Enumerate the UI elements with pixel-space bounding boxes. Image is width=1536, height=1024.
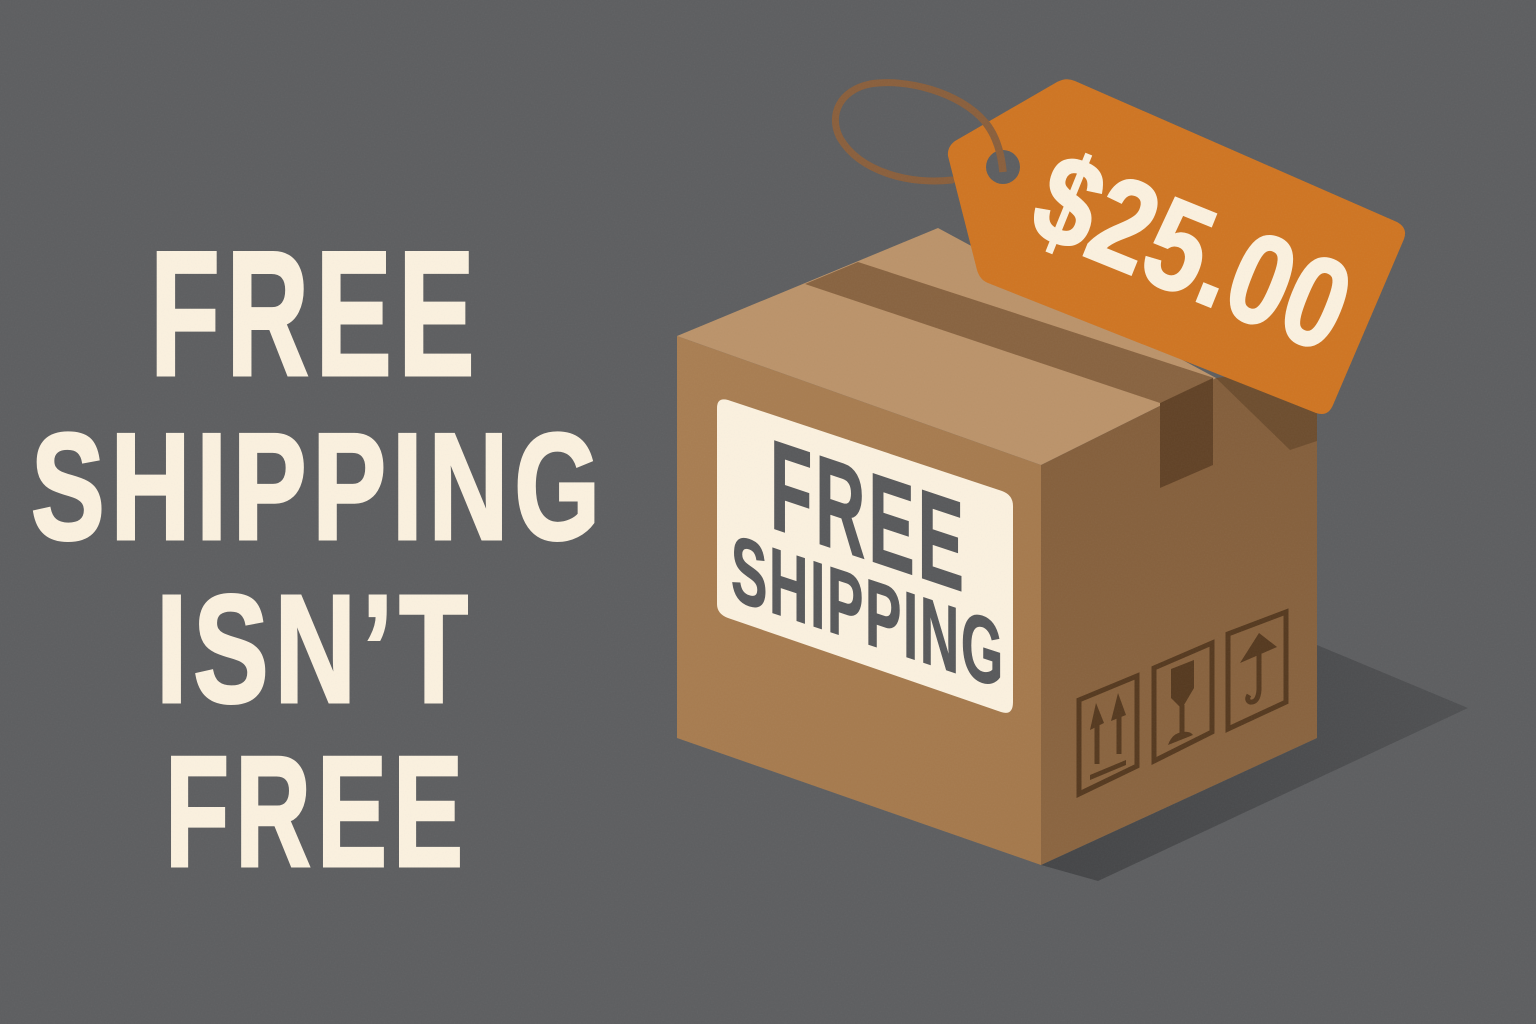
title: Free Shipping Isn't Free: ISN’T [156, 563, 474, 735]
icon: keep dry umbrella [1228, 612, 1286, 729]
free shipping sticker [717, 399, 1013, 713]
price: $25.00 [1015, 125, 1370, 380]
title: Free Shipping Isn't Free: FREE [150, 214, 481, 413]
tag body [948, 79, 1405, 414]
icon: fragile glass [1154, 643, 1212, 761]
tag shadow on box [1216, 375, 1317, 450]
free shipping sticker: SHIPPING [731, 515, 1005, 710]
ground shadow [1041, 645, 1468, 881]
packing tape [805, 262, 1214, 488]
title: Free Shipping Isn't Free: FREE [165, 724, 469, 900]
icon: this way up [1079, 676, 1137, 794]
box right face [1041, 378, 1317, 865]
box front face [677, 336, 1041, 865]
tag string loop [835, 83, 985, 181]
free shipping sticker: FREE [770, 412, 967, 620]
tag string through hole [985, 122, 1003, 172]
title: Free Shipping Isn't Free [31, 214, 606, 900]
handling icons [1079, 612, 1286, 794]
box top face [677, 228, 1216, 465]
price tag [835, 79, 1405, 414]
cardboard box [677, 228, 1317, 865]
title: Free Shipping Isn't Free: SHIPPING [31, 402, 606, 572]
